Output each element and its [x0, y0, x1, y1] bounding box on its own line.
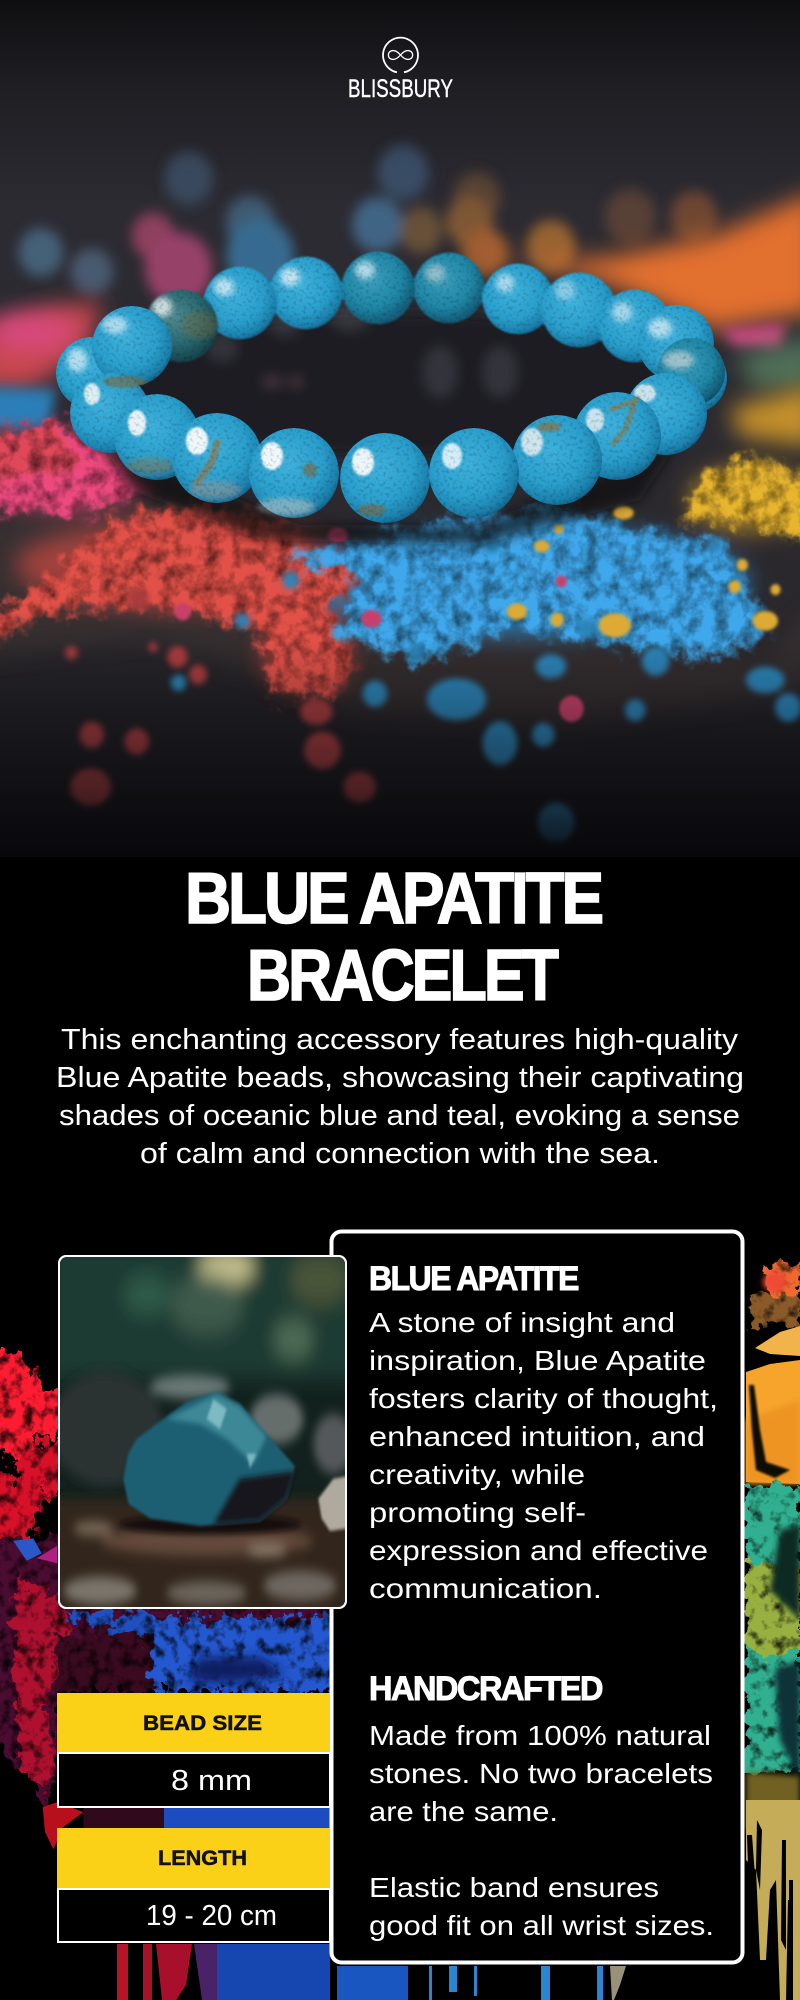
far left blue powder [0, 387, 56, 433]
pale orange stripe [755, 1326, 800, 1356]
scattered red grains [65, 588, 376, 806]
crimson layer [13, 1578, 80, 1792]
length label: LENGTH [158, 1847, 247, 1870]
blue band between tables [164, 1808, 331, 1828]
bead size value: 8 mm [171, 1765, 252, 1797]
blue apatite paragraph: enhanced intuition, and [369, 1421, 705, 1452]
length value box [58, 1889, 330, 1942]
stone highlight [167, 1394, 267, 1464]
salmon top of pink powder [0, 422, 92, 488]
blue powder [276, 505, 773, 664]
far left pink and orange powder [0, 302, 102, 389]
blue apatite paragraph: A stone of insight and [369, 1307, 675, 1338]
maroon band between tables [83, 1808, 164, 1828]
tan drip under panel [610, 1966, 626, 2000]
handcrafted paragraphs: good fit on all wrist sizes. [369, 1910, 714, 1941]
second red mass [0, 1439, 67, 1538]
bead size value box [58, 1753, 330, 1807]
ground pebbles [63, 1521, 337, 1605]
table: length [57, 1828, 330, 1942]
dark purple underlayer [0, 1538, 333, 1812]
powder and bokeh artwork [0, 145, 800, 842]
logo wordmark: BLISSBURY [348, 75, 453, 103]
dark maroon below blue band [57, 1633, 153, 1693]
brand logo [348, 38, 453, 103]
description: shades of oceanic blue and teal, evoking a sense [59, 1100, 740, 1132]
heading: handcrafted: HANDCRAFTED [369, 1670, 603, 1708]
logo ring icon [383, 38, 418, 72]
blue apatite stone photo [58, 1255, 347, 1609]
soft powder underlayer [0, 433, 800, 691]
speckled dark band [750, 1295, 800, 1330]
stone dark base [213, 1471, 295, 1524]
blue apatite paragraph: creativity, while [369, 1459, 585, 1490]
dark green patch [770, 1525, 800, 1620]
red-orange top [762, 1262, 800, 1300]
pink powder [0, 417, 153, 521]
bead shadows [100, 440, 680, 545]
blue apatite paragraph: expression and effective [369, 1535, 708, 1566]
dark gritty halo around powder [0, 494, 800, 724]
description: This enchanting accessory features high-quality [61, 1024, 739, 1056]
length header [57, 1828, 330, 1888]
blue paint under panel [337, 1966, 408, 2000]
handcrafted paragraphs: stones. No two bracelets [369, 1758, 713, 1789]
description: of calm and connection with the sea. [140, 1138, 660, 1170]
olive shade [746, 1772, 800, 1830]
description: Blue Apatite beads, showcasing their captivating [56, 1062, 744, 1094]
blue apatite paragraph [369, 1307, 718, 1604]
far right pink and green powder [719, 324, 786, 351]
stone shadow [120, 1515, 300, 1534]
blue apatite paragraph: communication. [369, 1573, 602, 1604]
title: BLUE APATITE [185, 859, 602, 939]
scattered blue grains [171, 538, 800, 842]
handcrafted paragraphs: Elastic band ensures [369, 1872, 659, 1903]
blue apatite stone [123, 1392, 295, 1526]
blue apatite paragraph: inspiration, Blue Apatite [369, 1345, 706, 1376]
yellow powder haze [730, 384, 800, 447]
black drip gaps [747, 1820, 793, 2000]
handcrafted paragraphs: are the same. [369, 1796, 558, 1827]
stone bright facets [207, 1399, 257, 1469]
tan drips [746, 1800, 800, 2000]
photo frame [58, 1255, 347, 1609]
thin blue drips [429, 1966, 603, 2000]
green bokeh [60, 1257, 345, 1384]
left blue paint band [63, 1613, 157, 1638]
bottom blue paint [217, 1944, 330, 2000]
length value: 19 - 20 cm [146, 1900, 277, 1932]
green paint [746, 1485, 800, 1772]
lime paint [746, 1560, 800, 1660]
description panel [332, 1232, 742, 1962]
right paint splash [746, 1262, 800, 2000]
bottom fade of hero photo [65, 650, 800, 848]
title: BRACELET [247, 936, 559, 1016]
black streak in orange [749, 1385, 790, 1478]
heading: blue apatite: BLUE APATITE [369, 1260, 579, 1298]
scattered pink grains [174, 528, 584, 722]
right beads [705, 363, 727, 410]
handcrafted paragraphs: Made from 100% natural [369, 1720, 711, 1751]
table: bead size [57, 1693, 330, 1807]
dark patch in blue paint [187, 1658, 287, 1683]
red drip [43, 1802, 83, 1849]
back row beads [144, 251, 672, 363]
scattered yellow grains [507, 506, 781, 637]
left beads [56, 337, 104, 402]
red splash [0, 1347, 67, 1459]
blue apatite paragraph: promoting self- [369, 1497, 586, 1528]
ground [60, 1496, 345, 1607]
bracelet reflections [206, 304, 518, 398]
orange deeper [746, 1400, 800, 1484]
description [56, 1024, 744, 1170]
blue apatite paragraph: fosters clarity of thought, [369, 1383, 718, 1414]
bokeh lights behind bracelet [18, 145, 717, 305]
blue spot beside photo [13, 1538, 42, 1561]
title [185, 859, 602, 1016]
small pale pebble [318, 1476, 347, 1531]
panel box [332, 1232, 742, 1962]
photo backdrop [57, 1250, 350, 1618]
red powder [0, 502, 367, 699]
bracelet beads [56, 251, 727, 523]
bottom left drips [117, 1944, 217, 2000]
orange paint [746, 1360, 800, 1484]
hero photo: bracelet on coloured powder [0, 0, 800, 857]
magenta spot beside photo [37, 1546, 57, 1563]
yellow powder [673, 455, 800, 549]
dark blue-green patch [775, 1660, 800, 1780]
front beads [249, 428, 339, 518]
handcrafted paragraphs [369, 1720, 714, 1941]
orange powder [459, 192, 800, 329]
left paint splash [0, 1347, 626, 2000]
bead size label: BEAD SIZE [143, 1712, 262, 1735]
blue paint band [150, 1618, 333, 1693]
bracelet centre shadow [120, 313, 690, 457]
bead size header [57, 1693, 330, 1752]
blurred background rocks [50, 1372, 353, 1486]
